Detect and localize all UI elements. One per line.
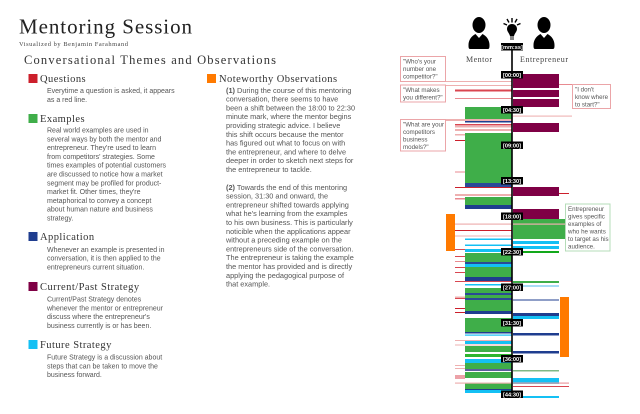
panel: current/past strategy: Current/Past Strategy [40,282,140,293]
panel: application: Whenever an example is presented in [47,247,165,254]
panel: examples: strategy. [47,216,73,222]
panel: examples [28,114,167,222]
icon: mentor [468,17,490,49]
panel: examples: times examples of potential customers [47,163,167,170]
time stamps: [36:00] [503,357,521,363]
panel: noteworthy observations: entrepreneur shifted towards applying [226,200,349,209]
time stamps: [09:00] [503,144,521,150]
panel: current/past strategy: Current/Past Strategy denotes [47,296,142,304]
timeline axis [511,46,513,396]
panel: application: entrepreneurs current situation. [47,264,144,271]
byline: Visualized by Benjamin Farahmand [19,41,129,48]
panel: noteworthy observations: Towards the end of this mentoring [235,183,347,192]
time stamps: [44:30] [503,392,521,398]
panel: noteworthy observations: this shift occurs because the mentor [226,130,344,139]
panel: noteworthy observations: the entrepreneur, and where to delve [226,147,346,156]
observation bar: first shift [446,214,455,251]
callout: specific audience examples: to target as his [568,236,609,243]
panel: noteworthy observations: what he's learning from the examples [225,209,348,218]
time stamps: [04:30] [503,108,521,114]
panel: noteworthy observations: has figured out what to focus on with [226,139,345,148]
callout: competitors business models: business [403,136,427,144]
panel: noteworthy observations: entrepreneurs side of the conversation. [226,244,353,253]
panel: questions: Questions [40,74,86,85]
panel: examples: segment may be profiled for product- [47,180,162,187]
panel: examples: market fit. Other times, they're [47,189,141,196]
panel: noteworthy observations: the mentor has provided and is directly [226,262,352,271]
callout: specific audience examples: gives specific [568,214,605,220]
panel: noteworthy observations: (1) [226,86,236,95]
callout: competitors business models: competitors [403,129,435,136]
panel: questions: Everytime a question is asked, it appears [47,88,175,95]
observation bar: second shift [560,297,569,357]
callout: where to start: know where [575,94,609,101]
time stamps: [18:00] [503,214,521,220]
axis labels: Mentor [466,55,492,64]
panel: current/past strategy: business currently is or has been. [47,323,151,330]
panel: future strategy: Future Strategy [40,340,112,351]
panel: examples: Real world examples are used in [47,128,149,134]
axis labels: Entrepreneur [520,55,568,64]
callout: number one competitor: number one [403,66,437,73]
panel: future strategy: business forward. [47,372,102,379]
panel: application: Application [40,232,95,243]
callout: what makes you different: "What makes [403,87,440,94]
time stamps [501,43,523,398]
chart: mentor timeline bars [465,107,512,393]
chart: question lines [446,81,572,387]
panel: noteworthy observations: without a preceding example on the [225,236,342,245]
panel: application: conversation, it is then applied to the [47,256,161,263]
panel: noteworthy observations: to his own business. This is particularly [226,218,353,227]
axis labels [466,55,568,64]
time stamps: [00:00] [503,73,521,79]
panel: noteworthy observations: (2) [226,183,236,192]
chart: entrepreneur timeline bars [513,74,565,398]
panel: examples: entrepreneur. They're used to learn [47,145,156,152]
panel: examples: about human nature and business [47,207,153,214]
title: Mentoring Session [19,14,192,38]
panel: noteworthy observations: noticible when the applications appear [226,227,351,236]
callout: competitors business models: models?" [403,144,429,151]
panel: noteworthy observations: The entrepreneur is taking the example [226,253,354,262]
callout: competitors business models: "What are your [403,122,444,128]
section heading: Conversational Themes and Observations [24,53,276,67]
callout: specific audience examples: who he wants [567,228,606,236]
panel: examples: are discussed to notice how a market [47,172,163,178]
panel: noteworthy observations: minute mark, where the mentor begins [226,112,352,121]
callout: specific audience examples: audience. [568,244,595,250]
panel: noteworthy observations: applying the pedagogical purpose of [226,271,345,280]
panel: application [28,232,165,271]
callout: where to start: to start?" [575,102,600,108]
time stamps: [mm:ss] [501,45,523,51]
icon: light bulb [504,18,520,40]
callout: where to start [572,84,610,108]
panel: current/past strategy: whenever the mentor or entrepreneur [46,305,164,312]
callout: number one competitor: "Who's your [403,58,436,66]
callout: specific audience examples: examples of [568,221,602,228]
panel: examples: several ways by both the mentor and [47,136,162,143]
panel: current/past strategy [28,282,164,330]
callout: competitors business models [400,120,446,151]
time stamps: [27:00] [503,286,521,292]
time stamps: [31:30] [503,321,521,327]
panel: future strategy: steps that can be taken to move the [47,363,158,370]
panel: examples: from competitors' strategies. Some [47,154,155,161]
panel: questions: as a red line. [47,97,87,104]
panel: noteworthy observations: deeper in order to sketch next steps for [226,156,354,165]
panel: noteworthy observations [207,74,355,289]
callout: where to start: "I don't [575,86,594,94]
panel: noteworthy observations: session, 31:30 and onward, the [226,192,328,201]
panel: noteworthy observations: conversation, there seems to have [226,95,338,104]
panel: noteworthy observations: During the course of this mentoring [235,86,351,95]
panel: noteworthy observations: been a shift between the 18:00 to 22:30 [226,103,355,112]
panel: future strategy [28,340,162,379]
panel: noteworthy observations: the entrepreneur to tackle. [226,165,312,174]
callout: specific audience examples [566,204,610,251]
panel: noteworthy observations: that example. [226,280,270,289]
panel: current/past strategy: discuss where the entrepreneur's [47,314,150,321]
panel: examples: metaphorical to convey a concept [47,198,151,205]
panel: future strategy: Future Strategy is a discussion about [47,354,162,362]
panel: examples: Examples [40,114,85,125]
time stamps: [13:30] [503,179,521,185]
callout: what makes you different [400,85,446,102]
panel: noteworthy observations: Noteworthy Observations [219,74,338,85]
panel: questions [28,74,175,104]
time stamps: [22:30] [503,250,521,256]
callout: what makes you different: you different?" [403,94,443,102]
callout: specific audience examples: Entrepreneur [568,206,604,213]
icon: entrepreneur [534,17,554,49]
panel: noteworthy observations: providing strategic advice. I believe [226,121,340,130]
callout: number one competitor: competitor?" [403,74,438,80]
callout: number one competitor [400,56,446,82]
